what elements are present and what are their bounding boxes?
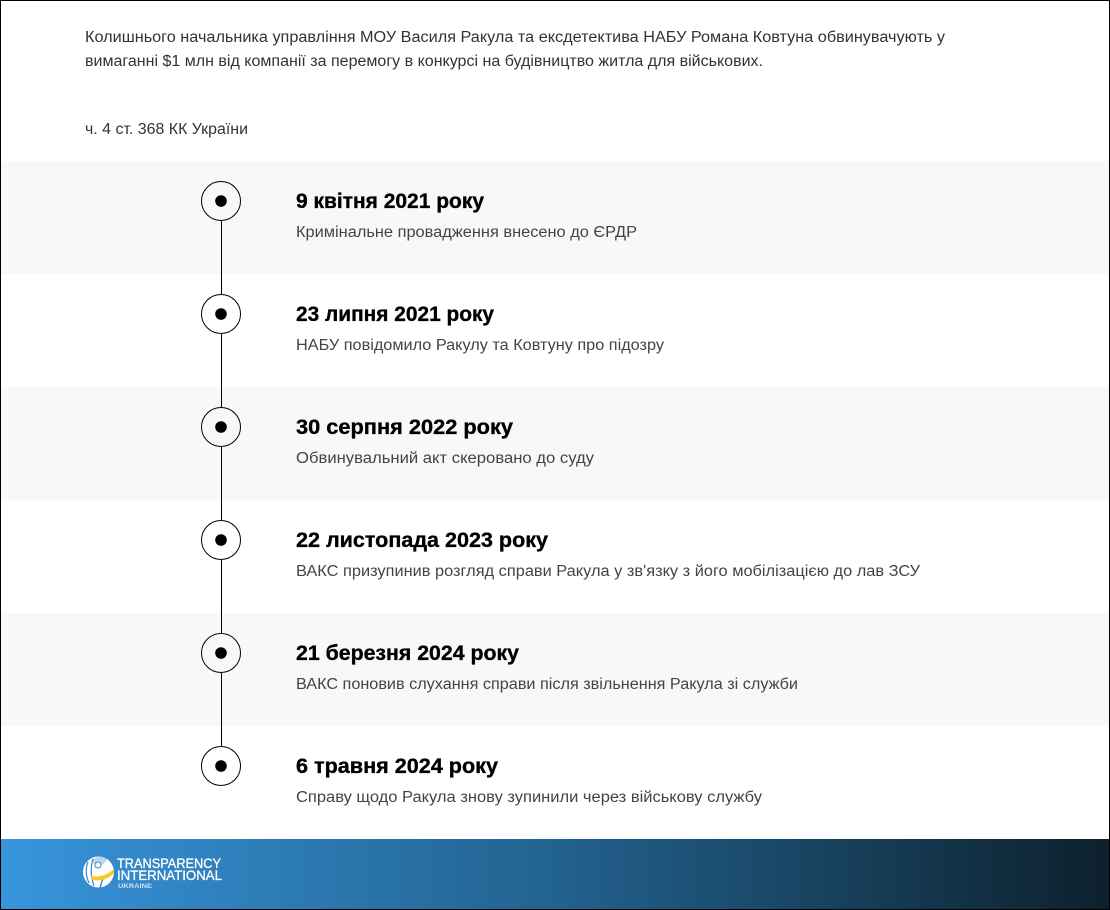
- logo wordmark: INTERNATIONAL: [117, 868, 222, 883]
- logo wordmark: TRANSPARENCY: [117, 856, 221, 871]
- date 6: 6 травня 2024 року: [296, 755, 498, 778]
- timeline event 2: [202, 294, 664, 354]
- marker 6: [202, 746, 240, 786]
- date 4: 22 листопада 2023 року: [296, 529, 548, 552]
- date 2: 23 липня 2021 року: [296, 303, 494, 326]
- timeline event 3: [202, 408, 594, 467]
- timeline event 4: [202, 520, 920, 580]
- description 2: НАБУ повідомило Ракулу та Ковтуну про підозру: [296, 337, 664, 354]
- timeline event 1: [202, 182, 637, 241]
- intro text: [85, 29, 945, 70]
- timeline event 6: [202, 746, 762, 806]
- logo wordmark: [117, 856, 222, 890]
- description 1: Кримінальне провадження внесено до ЄРДР: [296, 224, 637, 241]
- icon: globe with figure: [83, 856, 114, 888]
- marker 5: [202, 634, 240, 672]
- intro text: Колишнього начальника управління МОУ Василя Ракула та ексдетектива НАБУ Романа Ковтуна обвинувачують у: [85, 29, 945, 46]
- marker 1: [202, 182, 240, 220]
- marker 4: [202, 520, 240, 560]
- date 3: 30 серпня 2022 року: [296, 416, 513, 439]
- marker 3: [202, 408, 240, 446]
- description 4: ВАКС призупинив розгляд справи Ракула у зв'язку з його мобілізацією до лав ЗСУ: [296, 563, 920, 580]
- panel: event 3 background: [1, 387, 1109, 500]
- description 5: ВАКС поновив слухання справи після звільнення Ракула зі служби: [296, 676, 798, 693]
- date 5: 21 березня 2024 року: [296, 642, 519, 665]
- footer logo: Transparency International Ukraine: [83, 856, 222, 890]
- timeline axis: [220, 201, 222, 766]
- timeline event 5: [202, 634, 798, 693]
- panel: event 5 background: [1, 613, 1109, 726]
- intro text: вимаганні $1 млн від компанії за перемогу в конкурсі на будівництво житла для військових.: [85, 53, 763, 70]
- footer band: [1, 839, 1109, 909]
- description 3: Обвинувальний акт скеровано до суду: [296, 450, 594, 467]
- date 1: 9 квітня 2021 року: [296, 190, 484, 213]
- description 6: Справу щодо Ракула знову зупинили через військову службу: [296, 789, 762, 806]
- logo wordmark: UKRAINE: [118, 883, 153, 890]
- marker 2: [202, 294, 240, 334]
- panel: event 1 background: [1, 161, 1109, 274]
- legal article reference: ч. 4 ст. 368 КК України: [85, 121, 248, 138]
